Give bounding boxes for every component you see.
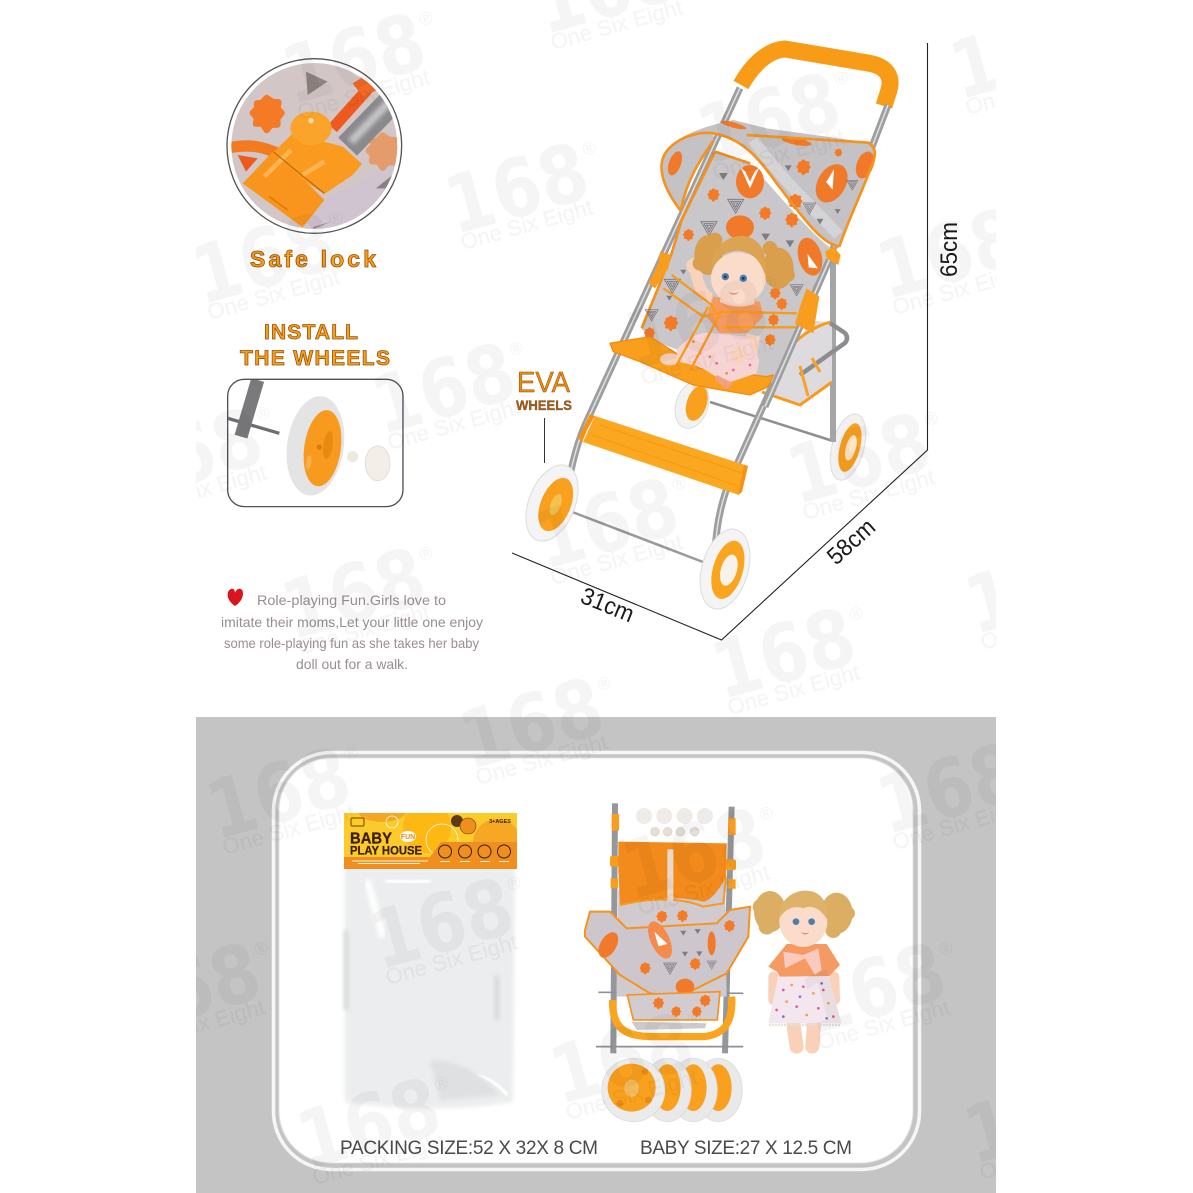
watermarks: 168 One Six Eight: 168 bbox=[107, 925, 270, 1053]
package header card bbox=[344, 813, 517, 869]
text block: description: some role-playing fun as she takes her baby bbox=[224, 635, 479, 651]
watermarks: 168 One Six Eight: 168 bbox=[612, 790, 775, 918]
label: EVA wheels bbox=[516, 367, 572, 463]
plastic bag bbox=[345, 868, 515, 1108]
four wheels bbox=[602, 1058, 742, 1122]
watermarks: 168 One Six Eight: 168 bbox=[777, 395, 940, 523]
right tube over seat bbox=[765, 260, 829, 407]
text block: description: imitate their moms,Let your little one enjoy bbox=[221, 614, 483, 630]
watermarks: 168 One Six Eight: 168 bbox=[867, 190, 1030, 318]
watermarks: 168 One Six Eight: One Six Eight bbox=[978, 594, 1115, 655]
watermarks: 168 One Six Eight: One Six Eight bbox=[977, 1124, 1114, 1185]
watermarks: 168 One Six Eight: ® bbox=[252, 937, 270, 960]
watermarks: 168 One Six Eight: 168 bbox=[182, 195, 345, 323]
watermarks: 168 One Six Eight: One Six Eight bbox=[815, 994, 952, 1055]
watermarks: 168 One Six Eight: ® bbox=[937, 937, 955, 960]
watermarks: 168 One Six Eight: One Six Eight bbox=[800, 464, 937, 525]
dimension lines bbox=[512, 43, 928, 640]
watermarks: 168 One Six Eight: 168 bbox=[109, 390, 272, 518]
watermarks: 168 One Six Eight: One Six Eight bbox=[130, 994, 267, 1055]
canopy bbox=[662, 119, 878, 247]
seat clips bbox=[648, 247, 841, 333]
watermarks: 168 One Six Eight: ® bbox=[580, 137, 598, 160]
small washers bbox=[651, 827, 699, 836]
package title: PLAY HOUSE bbox=[350, 844, 422, 858]
watermarks: 168 One Six Eight: 168 bbox=[360, 860, 523, 988]
package badges bbox=[451, 815, 476, 834]
circular detail: safe lock bbox=[226, 57, 406, 237]
watermarks: 168 One Six Eight: ® bbox=[847, 602, 865, 625]
watermarks: 168 One Six Eight: 168 bbox=[272, 530, 435, 658]
watermarks: 168 One Six Eight: ® bbox=[342, 742, 360, 765]
wheel caps and washers bbox=[636, 808, 713, 824]
watermarks: 168 One Six Eight: ® bbox=[685, 1007, 703, 1030]
age label: 3+AGES bbox=[489, 819, 511, 825]
panel: bottom contents background bbox=[196, 717, 996, 1193]
watermarks: 168 One Six Eight: 168 bbox=[687, 55, 850, 183]
watermarks: 168 One Six Eight: One Six Eight bbox=[220, 799, 357, 860]
FUN badge bbox=[400, 831, 416, 842]
watermarks: 168 One Six Eight: 168 bbox=[287, 1060, 450, 1188]
caption: packing and baby size: PACKING SIZE:52 X 32X 8 CM bbox=[340, 1138, 598, 1159]
watermarks: 168 One Six Eight: 168 bbox=[954, 1055, 1117, 1183]
folded handle bbox=[613, 997, 732, 1037]
caption: packing and baby size bbox=[340, 1138, 852, 1159]
package title: BABY bbox=[350, 830, 393, 848]
watermarks: 168 One Six Eight: ® bbox=[1012, 737, 1030, 760]
watermarks: 168 One Six Eight: One Six Eight bbox=[635, 859, 772, 920]
watermarks: 168 One Six Eight: 168 bbox=[450, 660, 613, 788]
package title bbox=[350, 832, 422, 855]
watermarks: 168 One Six Eight: 168 bbox=[615, 260, 778, 388]
watermarks: 168 One Six Eight: ® bbox=[922, 407, 940, 430]
dimension: height 65cm: 65cm bbox=[936, 222, 963, 277]
label: EVA wheels: EVA bbox=[517, 367, 571, 399]
stroller front tubes bbox=[564, 88, 888, 562]
watermarks: 168 One Six Eight: ® bbox=[757, 802, 775, 825]
stroller handle bbox=[741, 49, 890, 106]
watermarks: 168 One Six Eight: ® bbox=[507, 337, 525, 360]
watermarks: 168 One Six Eight: ® bbox=[1012, 202, 1030, 225]
watermarks: 168 One Six Eight: ® bbox=[327, 207, 345, 230]
stroller seat, canopy and doll bbox=[610, 119, 878, 407]
heading: install the wheels bbox=[240, 321, 390, 370]
watermarks: 168 One Six Eight: ® bbox=[760, 272, 778, 295]
watermarks: 168 One Six Eight: One Six Eight bbox=[205, 264, 342, 325]
text block: description: doll out for a walk. bbox=[296, 656, 408, 672]
watermarks: 168 One Six Eight: One Six Eight bbox=[132, 459, 269, 520]
watermarks: 168 One Six Eight: 168 bbox=[792, 925, 955, 1053]
FUN badge: FUN bbox=[401, 834, 415, 841]
dimension: width 31cm: 31cm bbox=[577, 583, 638, 628]
watermarks: 168 One Six Eight: 168 bbox=[525, 460, 688, 588]
text block: description: Role-playing Fun.Girls love to bbox=[257, 592, 446, 608]
watermarks: 168 One Six Eight: 168 bbox=[540, 995, 703, 1123]
watermarks: 168 One Six Eight: 168 bbox=[197, 730, 360, 858]
harness straps bbox=[663, 275, 797, 371]
text block: description bbox=[221, 592, 483, 672]
watermarks: 168 One Six Eight: 168 bbox=[867, 725, 1030, 853]
watermarks: 168 One Six Eight: One Six Eight bbox=[473, 729, 610, 790]
watermarks: 168 One Six Eight: ® bbox=[832, 67, 850, 90]
heading: install the wheels: THE WHEELS bbox=[240, 347, 390, 370]
seat fabric bbox=[642, 152, 833, 383]
caption: packing and baby size: BABY SIZE:27 X 12.5 CM bbox=[640, 1138, 852, 1159]
watermarks: 168 One Six Eight: ® bbox=[254, 402, 272, 425]
stroller rear wheels and axle bbox=[669, 377, 872, 484]
watermarks: 168 One Six Eight: ® bbox=[595, 672, 613, 695]
heading: install the wheels: INSTALL bbox=[264, 321, 358, 344]
detail box: wheel installation bbox=[228, 379, 403, 507]
watermarks: 168 One Six Eight: One Six Eight bbox=[710, 124, 847, 185]
watermarks: 168 One Six Eight: ® bbox=[417, 542, 435, 565]
watermarks: 168 One Six Eight: 168 bbox=[362, 325, 525, 453]
watermarks: 168 One Six Eight: One Six Eight bbox=[563, 1064, 700, 1125]
watermarks: 168 One Six Eight: ® bbox=[417, 7, 435, 30]
doll in stroller bbox=[660, 233, 795, 389]
watermarks: 168 One Six Eight: 168 bbox=[702, 590, 865, 718]
watermarks: 168 One Six Eight: One Six Eight bbox=[383, 929, 520, 990]
watermarks: 168 One Six Eight: One Six Eight bbox=[295, 64, 432, 125]
watermarks: 168 One Six Eight: One Six Eight bbox=[458, 194, 595, 255]
panel: package bbox=[344, 800, 521, 1108]
stroller rear frame and basket bbox=[762, 262, 847, 442]
orange clips bbox=[610, 814, 736, 889]
watermarks: 168 One Six Eight: ® bbox=[432, 1072, 450, 1095]
watermarks: 168 One Six Eight: One Six Eight bbox=[963, 59, 1100, 120]
seat footrest fabric bbox=[610, 337, 773, 395]
product: stroller with doll bbox=[516, 49, 890, 615]
watermarks: 168 One Six Eight: ® bbox=[505, 872, 523, 895]
watermarks: 168 One Six Eight: One Six Eight bbox=[638, 329, 775, 390]
folded seat fabric bbox=[585, 842, 750, 1030]
product contents: doll bbox=[753, 891, 855, 1047]
stroller footrest bbox=[578, 414, 748, 495]
heading: safe lock: Safe lock bbox=[250, 246, 376, 272]
label: EVA wheels: WHEELS bbox=[516, 397, 572, 413]
watermarks: 168 One Six Eight: One Six Eight bbox=[725, 659, 862, 720]
product contents: folded stroller parts bbox=[585, 803, 750, 1122]
stroller front wheels bbox=[516, 457, 758, 615]
watermarks: 168 One Six Eight: One Six Eight bbox=[385, 394, 522, 455]
watermarks: 168 One Six Eight: One Six Eight bbox=[310, 1129, 447, 1190]
watermarks: 168 One Six Eight: One Six Eight bbox=[890, 259, 1027, 320]
watermarks: 168 One Six Eight: One Six Eight bbox=[890, 794, 1027, 855]
feature icons bbox=[438, 845, 510, 858]
watermarks: 168 One Six Eight: 168 bbox=[955, 525, 1118, 653]
watermarks: 168 One Six Eight: One Six Eight bbox=[548, 529, 685, 590]
watermarks: 168 One Six Eight: One Six Eight bbox=[295, 599, 432, 660]
dimension: depth 58cm: 58cm bbox=[822, 514, 881, 570]
watermarks: 168 One Six Eight: 168 bbox=[435, 125, 598, 253]
watermarks: 168 One Six Eight: ® bbox=[670, 472, 688, 495]
watermarks: 168 One Six Eight bbox=[196, 0, 996, 1172]
icon: heart bbox=[228, 589, 243, 606]
frame poles bbox=[596, 803, 743, 1053]
